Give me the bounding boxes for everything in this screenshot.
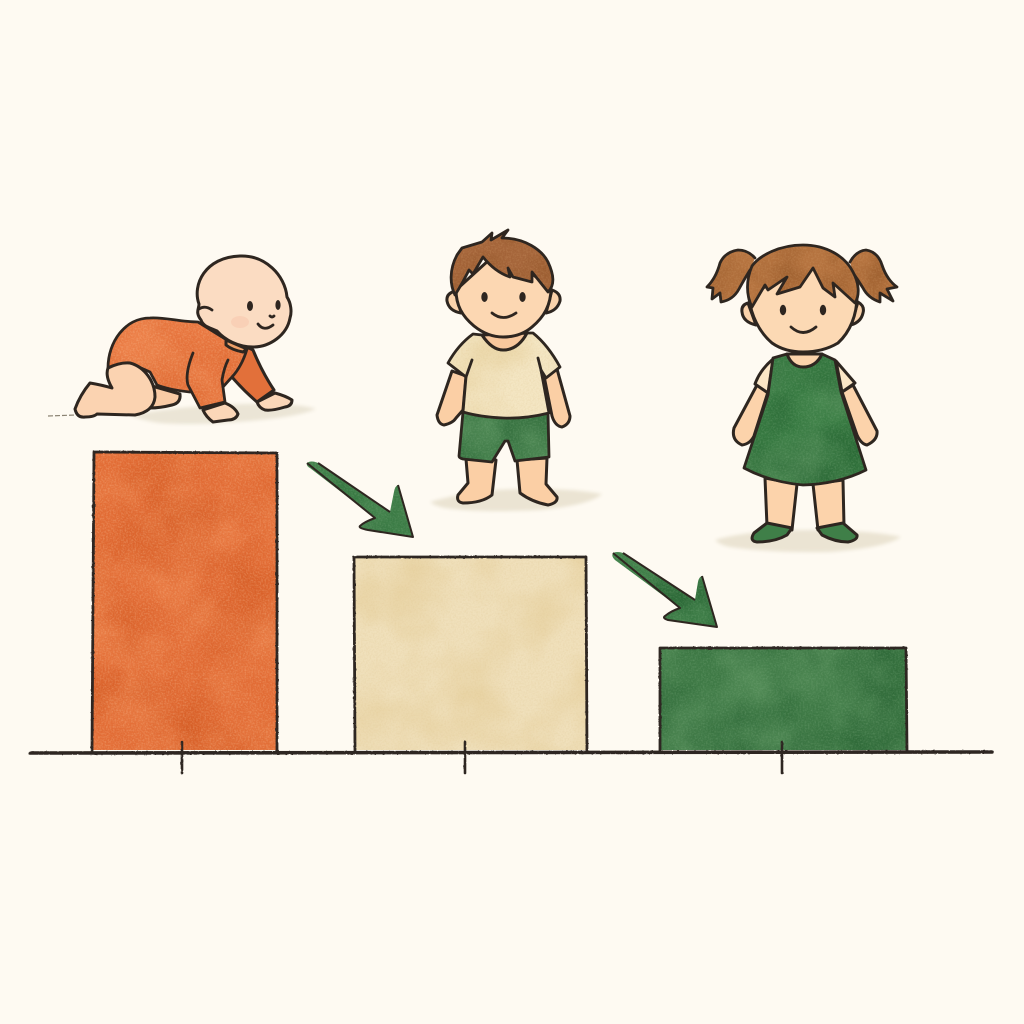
ponytail left [707, 250, 755, 302]
bar: toddler boy, medium beige [354, 557, 587, 751]
torso [108, 318, 247, 392]
neck [787, 354, 822, 367]
figure: standing girl [707, 245, 901, 552]
eyes [481, 292, 526, 302]
eyes [247, 300, 281, 311]
shadow: baby [130, 404, 316, 424]
bar: child girl, short green [660, 648, 907, 751]
cap sleeves [755, 359, 855, 393]
arrow: second decrease [612, 552, 717, 627]
sleeve seams [466, 358, 543, 378]
near sleeve [187, 353, 228, 408]
ground line: baby [48, 415, 76, 416]
face [456, 250, 551, 337]
mouth [791, 327, 816, 332]
arms [733, 385, 877, 445]
collar [226, 340, 247, 352]
ears [742, 302, 863, 325]
hair [748, 245, 858, 307]
bar: infant, tall orange [92, 452, 277, 751]
figure: crawling baby [48, 256, 316, 424]
mouth and nose [258, 316, 274, 328]
far arm [232, 347, 274, 402]
legs [765, 478, 844, 530]
shirt [448, 333, 560, 418]
mouth [492, 313, 516, 318]
ear [199, 307, 212, 310]
eyes [780, 305, 826, 315]
neck [482, 333, 527, 350]
cheek [231, 316, 249, 328]
shadow: girl [715, 530, 901, 552]
far hand [257, 393, 292, 410]
legs [458, 458, 557, 505]
hair [451, 230, 553, 295]
ears [447, 290, 560, 313]
leg and foot [75, 363, 155, 417]
arrow: first decrease [307, 462, 413, 537]
dress [744, 354, 866, 485]
arms [437, 369, 570, 427]
near hand [203, 403, 238, 422]
far leg [150, 386, 180, 408]
face [749, 260, 857, 352]
shoes [752, 523, 857, 542]
head [197, 256, 291, 347]
shorts [459, 412, 549, 462]
ponytail right [850, 250, 897, 302]
shadow: boy [430, 489, 602, 511]
figure: standing boy [430, 230, 602, 511]
x axis with tick marks [30, 742, 992, 773]
